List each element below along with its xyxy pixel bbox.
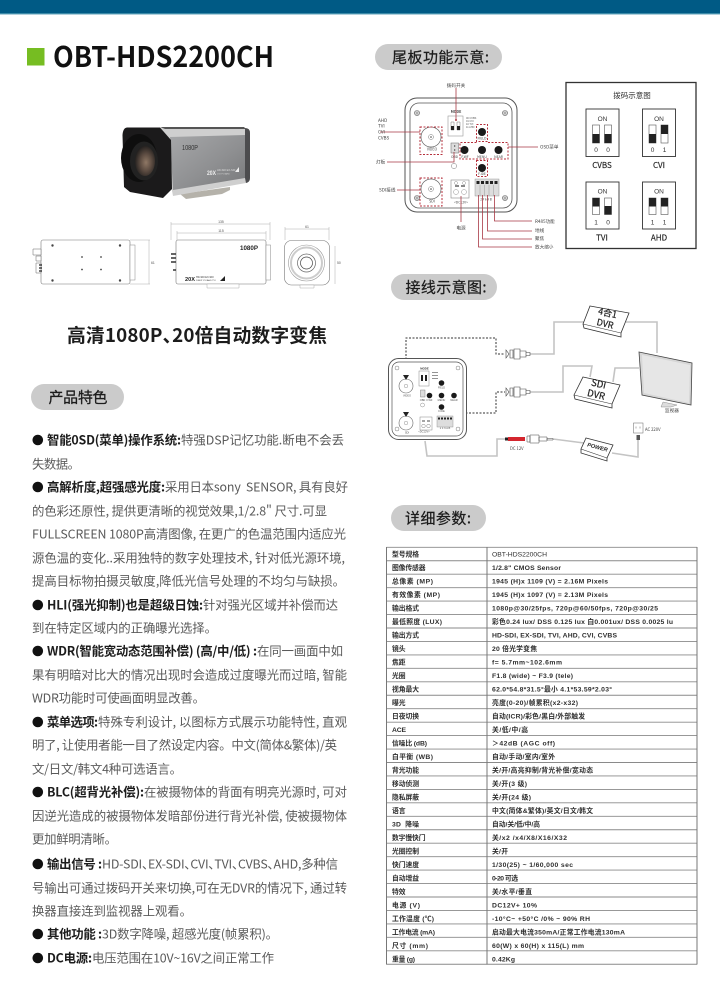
- table: specifications: 信噪比 (dB): [392, 739, 427, 748]
- camera rear panel: FIELD: [438, 386, 445, 390]
- text block: product features: HD-SDI、EX-SDI、CVI、TVI、CVBS、AHD,多种信: [102, 854, 338, 872]
- DIP setting: CVI: 0: [651, 147, 655, 154]
- table: specifications: 1080p@30/25fps, 720p@60/50fps, 720p@30/25: [492, 606, 658, 613]
- table: specifications: 视角最大: [392, 685, 419, 694]
- rear panel diagram: NEAR: [494, 154, 504, 159]
- table: specifications: 电源 (V): [392, 901, 420, 910]
- rear panel diagram: FIELD: [477, 136, 487, 140]
- power adapter: POWER: [586, 442, 608, 454]
- DIP setting: CVI: ON: [654, 116, 664, 123]
- table: specifications: 光圈控制: [392, 847, 419, 856]
- table: specifications: 焦距: [392, 658, 406, 667]
- text block: product features: 提高目标物拍摄灵敏度,降低光信号处理的不均匀与缺损。: [32, 572, 345, 590]
- dimension drawing: side view: 115: [218, 229, 224, 233]
- table: specifications: 60(W) x 60(H) x 115(L) mm: [492, 943, 584, 950]
- dimension drawing: side view: [171, 220, 270, 288]
- table: specifications: 总像素 (MP): [392, 577, 433, 586]
- text block: product features: 果有明暗对比大的情况出现时会造成过度曝光而过暗, 智能: [32, 666, 347, 684]
- table: specifications: [386, 547, 697, 964]
- DIP setting: AHD: 1: [663, 220, 667, 226]
- table: specifications: 0-20 可选: [492, 874, 518, 883]
- table: specifications: 中文(简体&繁体)/英文/日文/韩文: [492, 806, 593, 815]
- rear panel diagram: R485功能: [535, 218, 555, 225]
- text block: product features: 特殊专利设计, 以图标方式展示功能特性, 直观: [98, 712, 347, 730]
- table: specifications: 62.0*54.8*31.5°最小 4.1*53.59*2.03°: [492, 685, 612, 694]
- text block: product features: 电压范围在10V~16V之间正常工作: [92, 948, 274, 966]
- heading pill: wiring: [391, 274, 497, 300]
- dimension drawing: side view: 1080P: [240, 245, 259, 252]
- table: specifications: 1945 (H)x 1109 (V) = 2.16M Pixels: [492, 579, 608, 586]
- text block: product features: 采用日本sony SENSOR, 具有良好: [165, 478, 348, 496]
- DIP setting: CVBS: 0: [606, 147, 610, 154]
- camera rear panel: F.IDE: [438, 409, 445, 413]
- table: specifications: 1945 (H)x 1097 (V) = 2.13M Pixels: [492, 592, 608, 599]
- rear panel diagram: CVI: [378, 130, 385, 136]
- rear panel diagram: OSD菜单: [540, 144, 559, 150]
- rear panel diagram: [376, 82, 559, 250]
- text block: product features: 针对强光区域并补偿而达: [203, 596, 338, 614]
- text block: product features: 源色温的变化..采用独特的数字处理技术, 针对低光源环境,: [32, 548, 345, 566]
- top banner: [0, 0, 720, 14]
- table: specifications: ACE: [392, 727, 406, 734]
- product photo: camera: [121, 127, 250, 199]
- table: specifications: 最低照度 (LUX): [392, 617, 442, 626]
- table: specifications: 移动侦测: [392, 779, 419, 788]
- DIP setting: CVI: [642, 109, 676, 171]
- heading pill: rear panel: 尾板功能示意:: [392, 46, 489, 68]
- DVR: SDI: [574, 374, 620, 408]
- table: specifications: 型号规格: [392, 550, 419, 559]
- table: specifications: 关/x2 /x4/X8/X16/X32: [492, 833, 567, 842]
- DVR: 4-in-1: 4合1: [597, 304, 618, 321]
- text block: product features: 菜单选项:: [47, 712, 98, 730]
- heading pill: specifications: [391, 505, 486, 531]
- table: specifications: 输出格式: [392, 604, 419, 613]
- DIP setting: CVI: CVI: [653, 160, 665, 171]
- text block: product features: BLC(超背光补偿):: [47, 782, 144, 800]
- rear panel diagram: VIDEO: [427, 148, 438, 152]
- text block: product features: 更加鲜明清晰。: [32, 830, 117, 848]
- table: specifications: ＞42dB (AGC off): [492, 741, 555, 748]
- text block: product features: 失数据。: [32, 454, 80, 472]
- BNC connector: upper: [506, 349, 530, 359]
- table: specifications: 图像传感器: [392, 563, 426, 572]
- heading pill: rear panel: [375, 44, 502, 70]
- dimension drawing: bottom view: 61: [151, 261, 155, 265]
- DIP setting: CVBS: 0: [594, 147, 598, 154]
- table: specifications: 1/30(25) ~ 1/60,000 sec: [492, 862, 573, 869]
- text block: product features: FULLSCREEN 1080P高清图像, 在更广的色温范围内适应光: [32, 524, 346, 542]
- table: specifications: 日夜切换: [392, 712, 419, 721]
- product photo: camera: CVI TVI AHD: [217, 172, 230, 176]
- table: specifications: HD-SDI, EX-SDI, TVI, AHD, CVI, CVBS: [492, 633, 617, 640]
- wiring diagram: [388, 304, 692, 461]
- DVR: SDI: DVR: [586, 385, 607, 403]
- table: specifications: 自动/手动/室内/室外: [492, 752, 555, 761]
- camera rear panel: [388, 358, 466, 440]
- rear panel diagram: 灯板: [376, 158, 386, 166]
- table: specifications: 彩色0.24 lux/ DSS 0.125 lux 白0.001ux/ DSS 0.0025 lu: [492, 617, 673, 626]
- text block: product features: 高解析度,超强感光度:: [47, 478, 165, 496]
- table: specifications: 20 倍光学变焦: [492, 644, 537, 653]
- table: specifications: 工作电流 (mA): [392, 928, 435, 937]
- DIP setting: CVBS: ON: [598, 116, 608, 123]
- table: specifications: 输出方式: [392, 631, 419, 640]
- wall outlet: AC 220V: [645, 427, 661, 433]
- text block: product features: 在被摄物体的背面有明亮光源时, 可对: [144, 782, 347, 800]
- rear panel diagram: 2 F 6 A B: [480, 198, 492, 202]
- dimension drawing: front view: [284, 225, 341, 288]
- DIP setting: TVI: 1: [594, 220, 598, 226]
- product photo: camera: HD-SDI EX-SDI: [217, 168, 236, 172]
- dimension drawing: side view: 135: [218, 220, 224, 224]
- DVR: SDI: SDI: [590, 375, 608, 392]
- table: specifications: 亮度(0-20)/帧累积(x2-x32): [492, 698, 578, 707]
- monitor: [639, 352, 692, 414]
- text block: product features: 其他功能 :: [47, 924, 102, 942]
- text block: product features: 输出信号 :: [47, 854, 102, 872]
- heading pill: product features: 产品特色: [48, 386, 108, 408]
- DVR: 4-in-1: [583, 304, 629, 337]
- rear panel diagram: CVBS: [378, 136, 390, 142]
- table: specifications: 自动增益: [392, 874, 419, 883]
- table: specifications: 关/开(3 级): [492, 779, 527, 788]
- text block: product features: 因逆光造成的被摄物体发暗部份进行背光补偿, 使被摄物体: [32, 806, 348, 824]
- product photo: camera: 20X: [207, 171, 216, 177]
- rear panel diagram: 地线: [535, 227, 545, 234]
- rear panel diagram: 00 CVBS: [466, 117, 477, 120]
- DIP setting: AHD: [642, 182, 676, 244]
- table: specifications: 1/2.8" CMOS Sensor: [492, 565, 561, 572]
- table: specifications: 背光功能: [392, 766, 419, 775]
- text block: product features: 到在特定区域内的正确曝光选择。: [32, 618, 217, 636]
- table: specifications: 3D 降噪: [392, 820, 419, 829]
- dimension drawing: side view: HD-SDI EX-SDI: [196, 276, 214, 279]
- rear panel diagram: AHD: [378, 118, 387, 124]
- table: specifications: DC12V+ 10%: [492, 903, 537, 910]
- text block: product features: 号输出可通过拨码开关来切换,可在无DVR的情况下, 通过转: [32, 878, 347, 896]
- rear panel diagram: 01 CVI: [466, 120, 474, 123]
- rear panel diagram: 放大缩小: [535, 244, 554, 250]
- table: specifications: 曝光: [392, 698, 406, 707]
- rear panel diagram: 11 AHD: [466, 126, 475, 129]
- DIP setting: AHD: 1: [651, 220, 655, 226]
- dimension drawing: bottom view: [33, 240, 155, 284]
- table: specifications: 有效像素 (MP): [392, 590, 440, 599]
- camera rear panel: F.WF: [426, 398, 433, 402]
- wall outlet: [634, 423, 661, 440]
- camera rear panel: 2 F 6 A B: [440, 426, 451, 430]
- table: specifications: 关/低/中/高: [492, 725, 528, 734]
- rear panel diagram: MODE: [451, 110, 461, 115]
- table: specifications: 镜头: [392, 644, 406, 653]
- table: specifications: 启动最大电流350mA/正常工作电流130mA: [492, 928, 625, 937]
- BNC connector: lower: [506, 387, 530, 397]
- DIP setting: AHD: ON: [654, 188, 664, 196]
- text block: product features: WDR功能时可使画面明显改善。: [32, 688, 205, 706]
- panel: DIP switch settings: [566, 82, 696, 248]
- DVR: 4-in-1: DVR: [595, 315, 615, 332]
- table: specifications: 关/开: [492, 847, 508, 856]
- DIP setting: TVI: TVI: [596, 232, 608, 244]
- table: specifications: 尺寸 (mm): [392, 941, 428, 950]
- DC 12V connector: DC 12V: [510, 446, 524, 452]
- rear panel diagram: SDI接线: [379, 186, 396, 194]
- text block: product features: DC电源:: [47, 948, 92, 966]
- text block: product features: 3D数字降噪, 超感光度(帧累积)。: [102, 924, 278, 942]
- rear panel diagram: MENU: [477, 154, 487, 159]
- rear panel diagram: TVI: [378, 124, 385, 130]
- table: specifications: 快门速度: [392, 860, 419, 869]
- camera rear panel: <DC12V>: [418, 430, 430, 434]
- dimension drawing: side view: 1080P CVI AHD TVI: [196, 279, 216, 282]
- table: specifications: 隐私屏蔽: [392, 793, 419, 802]
- table: specifications: 关/开/高亮抑制/背光补偿/宽动态: [492, 766, 593, 775]
- DC 12V connector: [505, 435, 553, 452]
- rear panel diagram: F.IDE: [478, 171, 486, 176]
- DIP setting: CVBS: [586, 109, 619, 171]
- product photo: camera: 1080P: [182, 145, 198, 152]
- table: specifications: 特效: [392, 887, 406, 896]
- heading pill: specifications: 详细参数:: [405, 508, 471, 528]
- text block: product features: 的色彩还原性, 提供更清晰的视觉效果,1/2.8" 尺寸.可显: [32, 502, 327, 520]
- camera rear panel: NEAR: [450, 398, 458, 402]
- table: specifications: 0.42Kg: [492, 957, 515, 964]
- camera rear panel: MENU: [438, 398, 445, 402]
- text block: product features: HLI(强光抑制)也是超级日蚀:: [47, 596, 203, 614]
- rear panel diagram: 10 TVI: [466, 123, 474, 126]
- table: specifications: 关/开(24 级): [492, 793, 531, 802]
- text block: product features: [32, 430, 348, 966]
- rear panel diagram: F.WF: [461, 154, 469, 159]
- dimension drawing: side view: 20X: [185, 277, 195, 283]
- table: specifications: 关/水平/垂直: [492, 887, 532, 896]
- text block: product features: WDR(智能宽动态范围补偿) (高/中/低) :: [47, 642, 257, 660]
- camera rear panel: MODE: [420, 366, 429, 370]
- heading pill: wiring: 接线示意图:: [406, 276, 486, 298]
- rear panel diagram: <DC12V>: [454, 200, 468, 204]
- table: specifications: OBT-HDS2200CH: [492, 552, 547, 559]
- table: specifications: -10°C~ +50°C /0% ~ 90% RH: [492, 915, 590, 923]
- rear panel diagram: 聚焦: [535, 235, 545, 242]
- camera rear panel: SDI: [405, 430, 409, 434]
- camera rear panel: OBD: [420, 398, 425, 402]
- table: specifications: 数字慢快门: [392, 833, 426, 842]
- table: specifications: 自动/关/低/中/高: [492, 820, 540, 829]
- title: model name: OBT-HDS2200CH: [53, 35, 274, 76]
- rear panel diagram: SDI: [429, 200, 435, 204]
- table: specifications: 自动(ICR)/彩色/黑白/外部触发: [492, 712, 585, 721]
- DIP setting: TVI: [586, 182, 619, 244]
- table: specifications: 光圈: [392, 671, 406, 680]
- rear panel diagram: OBD: [451, 154, 459, 159]
- DIP setting: TVI: 0: [606, 220, 610, 226]
- text block: product features: 文/日文/韩文4种可选语言。: [32, 760, 182, 778]
- dimension drawing: front view: 50: [337, 261, 341, 265]
- rear panel diagram: 电源: [456, 224, 466, 232]
- panel: DIP switch settings: 拨码示意图: [613, 90, 651, 101]
- text block: product features: 明了, 让使用者能一目了然设定内容。中文(简体&繁体)/英: [32, 736, 337, 754]
- text block: product features: 特强DSP记忆功能.断电不会丢: [181, 430, 344, 448]
- text block: product features: 在同一画面中如: [257, 642, 343, 660]
- table: specifications: 工作温度 (℃): [392, 914, 434, 923]
- table: specifications: 白平衡 (WB): [392, 752, 433, 761]
- camera rear panel: VIDEO: [403, 394, 411, 398]
- subtitle: 高清1080P、20倍自动数字变焦: [67, 321, 327, 348]
- table: specifications: f= 5.7mm~102.6mm: [492, 660, 562, 667]
- DIP setting: TVI: ON: [598, 188, 608, 196]
- table: specifications: 重量 (g): [392, 955, 415, 964]
- table: specifications: 语言: [392, 806, 406, 815]
- dimension drawing: front view: 61: [305, 225, 309, 229]
- heading pill: product features: [31, 384, 124, 410]
- text block: product features: 智能0SD(菜单)操作系统:: [47, 430, 181, 448]
- monitor: 监视器: [665, 407, 679, 414]
- DIP setting: CVBS: CVBS: [592, 160, 612, 171]
- text block: product features: 换器直接连到监视器上观看。: [32, 902, 192, 920]
- DIP setting: CVI: 1: [663, 147, 667, 154]
- table: specifications: F1.8 (wide) ~ F3.9 (tele): [492, 673, 573, 680]
- power adapter: [581, 438, 613, 461]
- DIP setting: AHD: AHD: [651, 232, 668, 244]
- rear panel diagram: 拨码开关: [447, 82, 466, 89]
